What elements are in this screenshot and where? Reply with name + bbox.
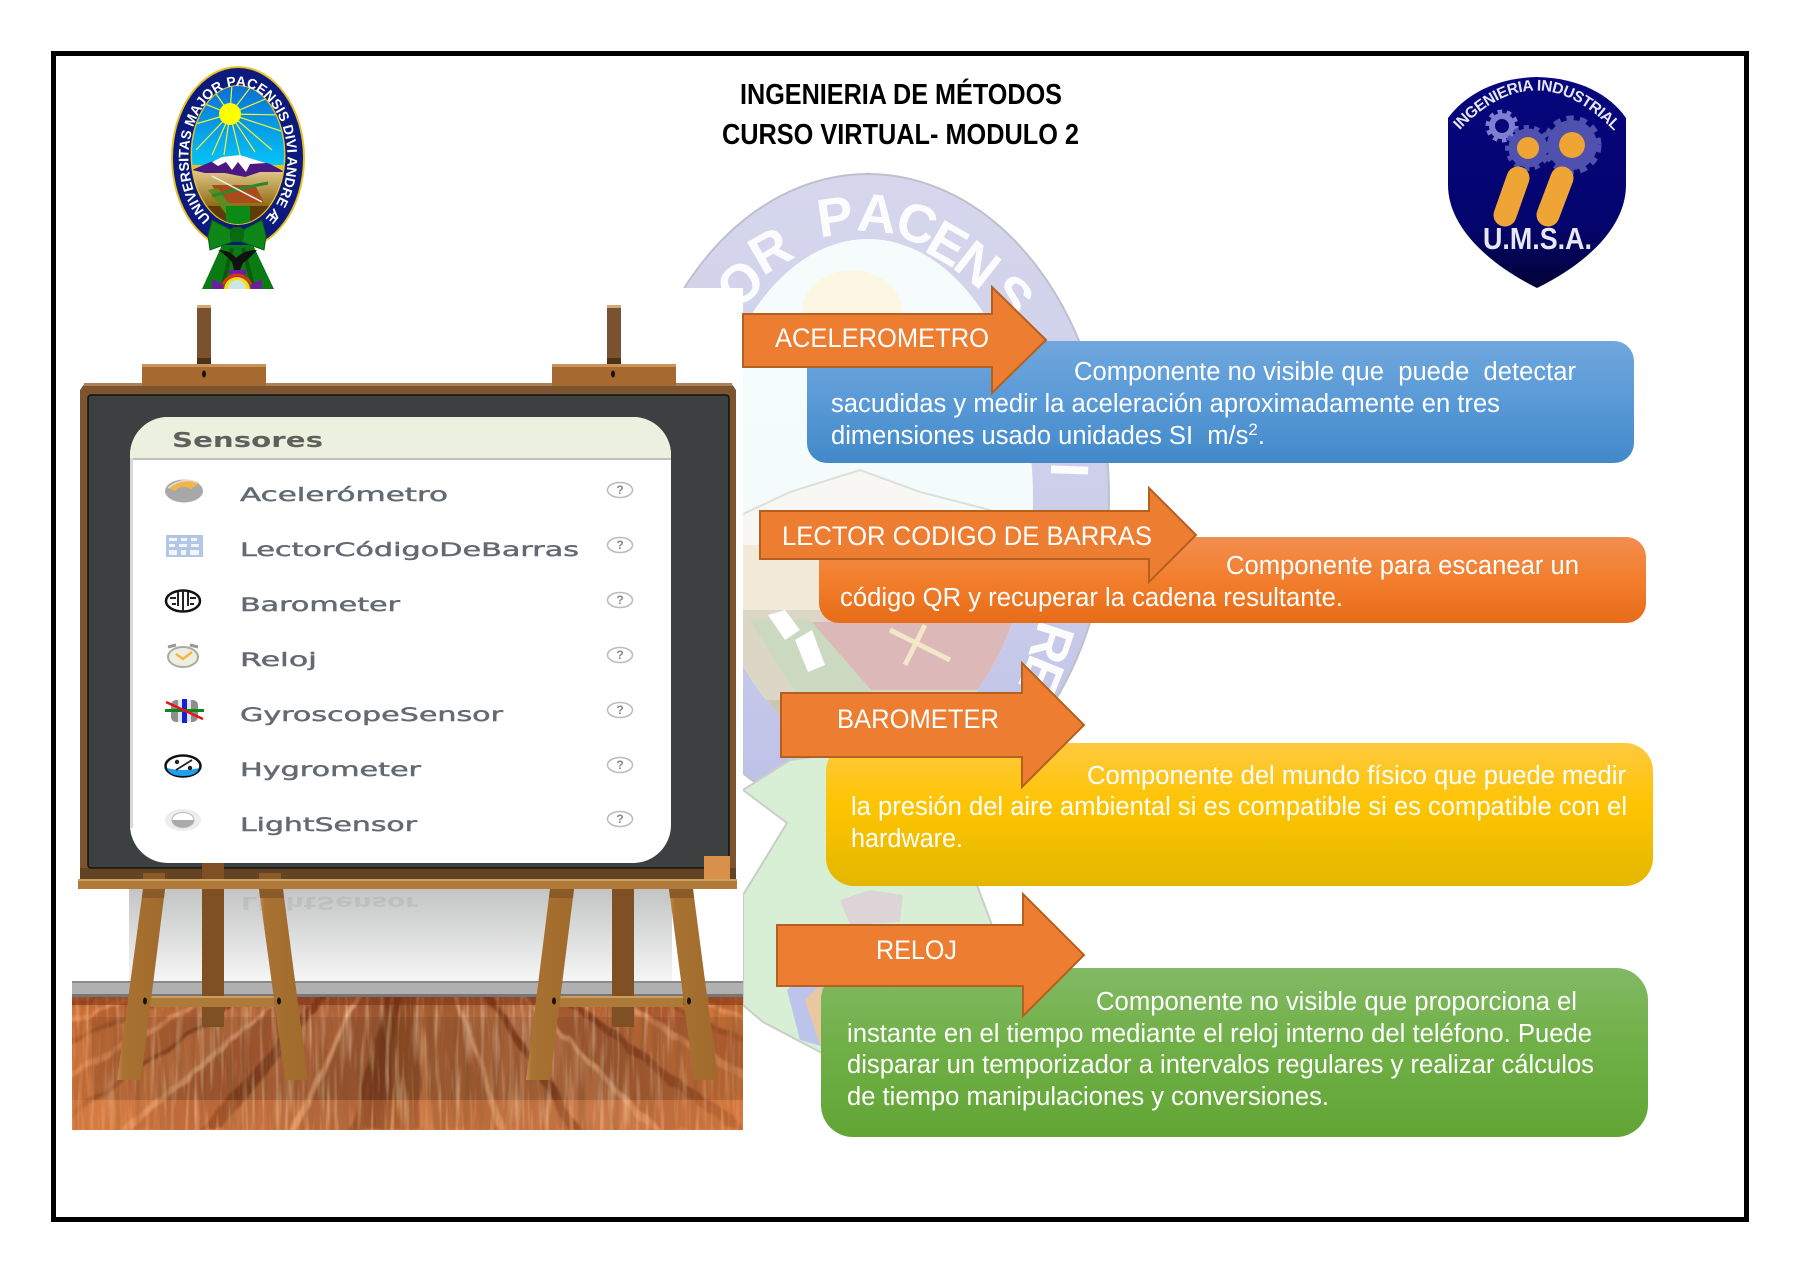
row: LectorCódigoDeBarras: ? bbox=[616, 538, 624, 552]
row: Reloj: Reloj bbox=[240, 649, 317, 671]
arrow: Barometer bbox=[781, 663, 1084, 787]
skirting band bbox=[72, 982, 743, 997]
shield arc text: INGENIERIA INDUSTRIAL bbox=[1452, 80, 1618, 131]
row: GyroscopeSensor: GyroscopeSensor bbox=[240, 704, 503, 726]
arrow: Barometer: BAROMETER bbox=[837, 704, 999, 734]
icon: double i pills bbox=[1505, 178, 1562, 215]
row: LightSensor: ? bbox=[616, 812, 624, 826]
panel: Reloj bbox=[777, 894, 1648, 1137]
title: CURSO VIRTUAL- MODULO 2 bbox=[722, 119, 1079, 151]
crossbars bbox=[149, 996, 274, 1007]
panel: Sensores list bbox=[130, 417, 671, 863]
watermark ring lettering: O bbox=[706, 247, 776, 320]
description: Reloj: Componente no visible que proporciona el bbox=[1096, 988, 1577, 1016]
ledge bbox=[78, 879, 737, 889]
row: Barometer: Barometer bbox=[240, 594, 400, 616]
panel heading: Sensores bbox=[172, 428, 323, 452]
description: Reloj: de tiempo manipulaciones y conversiones. bbox=[847, 1083, 1329, 1111]
row: Hygrometer: Hygrometer bbox=[240, 759, 421, 781]
watermark ring lettering: R bbox=[1016, 615, 1086, 671]
title: INGENIERIA DE MÉTODOS bbox=[740, 77, 1062, 111]
watermark ring lettering: A bbox=[855, 182, 899, 246]
description: Lector codigo de barras: código QR y recuperar la cadena resultante. bbox=[840, 584, 1343, 612]
description: Acelerometro: dimensiones usado unidades SI m/s bbox=[831, 422, 1248, 450]
row: LectorCódigoDeBarras bbox=[166, 535, 632, 561]
description: Barometer: la presión del aire ambiental si es compatible si es compatible con el bbox=[851, 793, 1627, 821]
row: GyroscopeSensor: ? bbox=[616, 703, 624, 717]
illustration: easel on wood floor bbox=[72, 305, 743, 1130]
watermark ring lettering: S bbox=[978, 263, 1045, 331]
wall reflection bbox=[129, 889, 672, 982]
row: GyroscopeSensor bbox=[165, 699, 632, 726]
row: Hygrometer bbox=[166, 756, 632, 781]
arrow: Lector codigo de barras: LECTOR CODIGO DE BARRAS bbox=[782, 521, 1152, 551]
watermark ring lettering bbox=[706, 182, 1099, 704]
shield label: U.M.S.A. bbox=[1483, 221, 1592, 256]
panel: Barometer bbox=[781, 663, 1653, 886]
description: Acelerometro bbox=[831, 358, 1576, 450]
row: LightSensor: LightSensor bbox=[240, 814, 417, 836]
lower frame shadow bbox=[80, 868, 736, 879]
row: Barometer: ? bbox=[616, 593, 624, 607]
top blocks bbox=[142, 364, 266, 386]
chalk block bbox=[704, 856, 730, 879]
watermark ribbon bbox=[743, 742, 1010, 1060]
description: Lector codigo de barras bbox=[840, 552, 1579, 612]
arrow: Reloj: RELOJ bbox=[876, 935, 957, 965]
watermark ring lettering: P bbox=[813, 185, 857, 249]
row: Barometer bbox=[166, 590, 632, 616]
arrow: Reloj bbox=[777, 894, 1084, 1016]
easel pegs bbox=[197, 305, 211, 365]
description: Barometer: hardware. bbox=[851, 825, 963, 853]
blackboard bbox=[88, 395, 729, 868]
row: Acelerómetro: ? bbox=[616, 483, 624, 497]
title bbox=[722, 77, 1079, 151]
row: LectorCódigoDeBarras: LectorCódigoDeBarras bbox=[240, 539, 579, 561]
arrow: Lector codigo de barras bbox=[760, 488, 1196, 582]
description: Acelerometro: . bbox=[1258, 422, 1265, 450]
description: Barometer: Componente del mundo físico que puede medir bbox=[1087, 762, 1626, 790]
description: Lector codigo de barras: Componente para escanear un bbox=[1226, 552, 1579, 580]
row: Reloj: ? bbox=[616, 648, 624, 662]
description: Reloj bbox=[847, 988, 1594, 1111]
board frame bbox=[80, 383, 736, 879]
watermark ring lettering: E bbox=[917, 209, 978, 279]
wood floor bbox=[72, 997, 743, 1130]
watermark ring lettering: E bbox=[1007, 648, 1076, 704]
watermark ring lettering: N bbox=[944, 229, 1011, 300]
watermark ring lettering: C bbox=[889, 189, 945, 259]
front legs bbox=[117, 889, 165, 1080]
logo: UMSA university seal bbox=[171, 66, 305, 289]
row: Reloj bbox=[168, 645, 632, 671]
row: Acelerómetro bbox=[165, 480, 632, 506]
watermark: university seal bbox=[683, 172, 1110, 1053]
row: Acelerómetro: Acelerómetro bbox=[240, 484, 448, 506]
white background behind easel bbox=[56, 288, 743, 1132]
panel: Acelerometro bbox=[743, 287, 1634, 463]
description: Acelerometro: sacudidas y medir la aceleración aproximadamente en tres bbox=[831, 390, 1500, 418]
description: Barometer bbox=[851, 762, 1627, 853]
row: LightSensor bbox=[165, 809, 632, 836]
watermark ring lettering: R bbox=[739, 215, 802, 287]
arrow: Acelerometro: ACELEROMETRO bbox=[775, 323, 989, 353]
panel: Lector codigo de barras bbox=[760, 488, 1646, 623]
arrow: Acelerometro bbox=[743, 287, 1046, 393]
row: Hygrometer: ? bbox=[616, 758, 624, 772]
watermark ring lettering: I bbox=[1039, 461, 1099, 479]
icon: gears bbox=[1488, 112, 1598, 171]
back legs bbox=[202, 860, 224, 1027]
description: Reloj: instante en el tiempo mediante el reloj interno del teléfono. Puede bbox=[847, 1020, 1592, 1048]
seal bow bbox=[208, 220, 237, 250]
logo: Ingenieria Industrial shield bbox=[1448, 77, 1626, 288]
description: Reloj: disparar un temporizador a intervalos regulares y realizar cálculos bbox=[847, 1051, 1594, 1079]
seal ring lettering: UNIVERSITAS MAJOR PACENSIS DIVI ANDRE Æ bbox=[178, 76, 298, 224]
description: Acelerometro: Componente no visible que puede detectar bbox=[1074, 358, 1576, 386]
illustration: easel on wood floor: LightSensor bbox=[241, 892, 418, 913]
description: Acelerometro: 2 bbox=[1248, 420, 1258, 439]
